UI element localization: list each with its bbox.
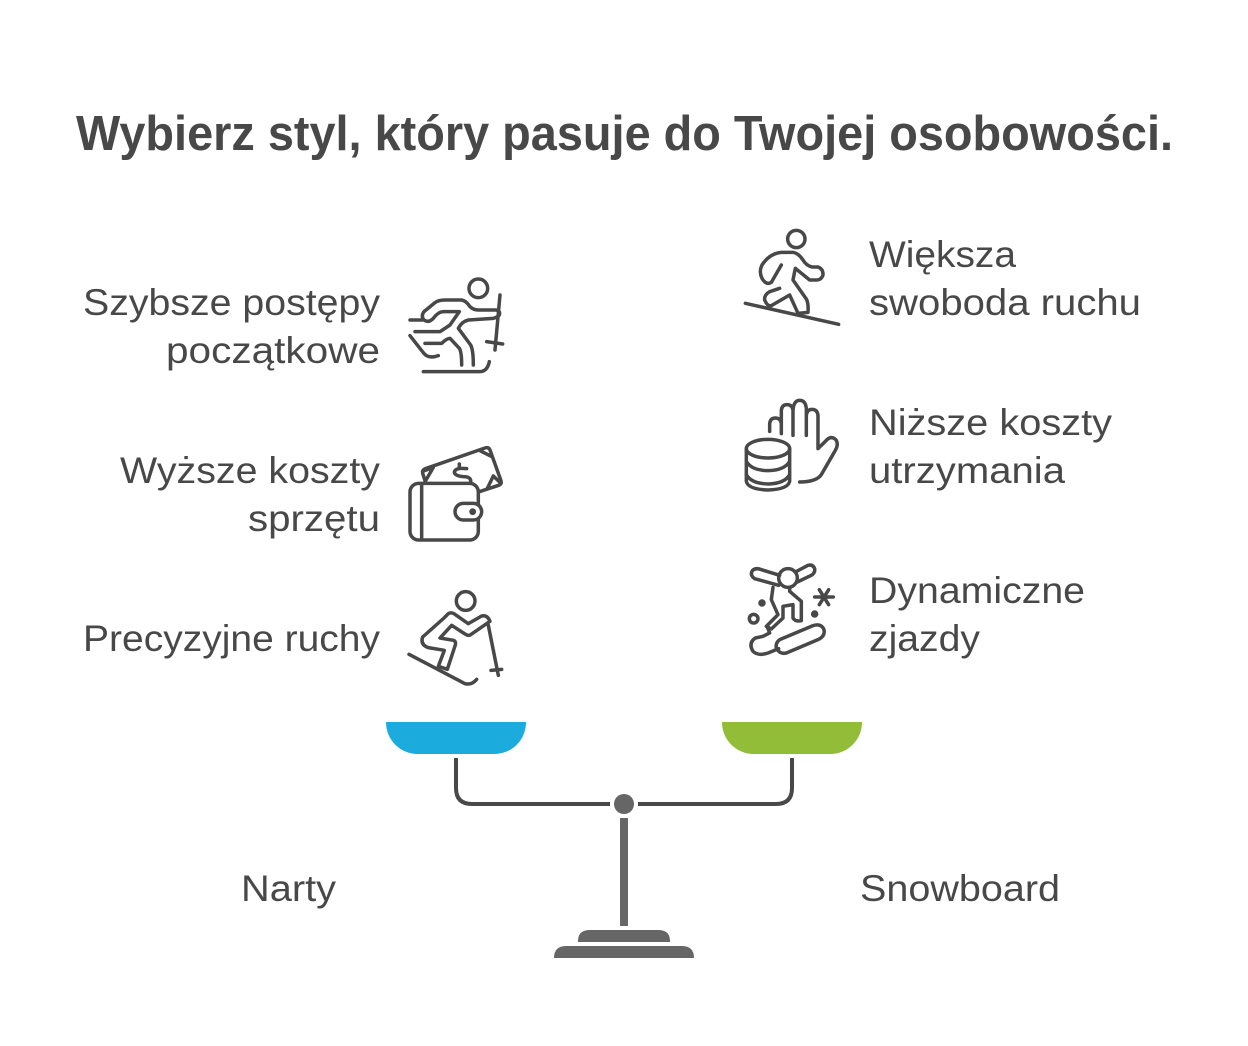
pivot [614, 794, 634, 814]
text: Niższe koszty utrzymania: Niższe koszty [869, 401, 1112, 443]
title: Wybierz styl, który pasuje do Twojej osobowości. [76, 107, 1173, 161]
icon: cross-country skier [410, 279, 503, 372]
text: Wyższe koszty sprzętu [120, 449, 380, 539]
text: Precyzyjne ruchy: Precyzyjne ruchy [83, 617, 380, 659]
label: Snowboard: Snowboard [860, 867, 1060, 909]
text: Niższe koszty utrzymania: utrzymania [869, 449, 1065, 491]
text: Dynamiczne zjazdy: zjazdy [869, 617, 980, 659]
text: Większa swoboda ruchu: swoboda ruchu [869, 281, 1141, 323]
right bowl [722, 722, 862, 754]
text: Wyższe koszty sprzętu: Wyższe koszty [120, 449, 380, 491]
beam [456, 758, 792, 804]
text: Szybsze postępy początkowe: Szybsze postępy [83, 281, 380, 323]
text: Dynamiczne zjazdy [869, 569, 1085, 659]
pole [620, 818, 628, 926]
text: Wyższe koszty sprzętu: sprzętu [248, 497, 380, 539]
balance scale [386, 722, 862, 958]
text: Niższe koszty utrzymania [869, 401, 1112, 491]
icon: wallet with banknote [410, 448, 501, 540]
icon: snowboarder on slope [745, 230, 839, 324]
text: Szybsze postępy początkowe: początkowe [166, 329, 380, 371]
icon: coins and hand [746, 400, 837, 490]
base [554, 930, 694, 958]
icon: downhill skier [409, 592, 502, 684]
text: Większa swoboda ruchu [869, 233, 1141, 323]
icon: snowboarder jumping [749, 565, 833, 654]
text: Szybsze postępy początkowe [83, 281, 380, 371]
label: Narty: Narty [241, 867, 336, 909]
text: Większa swoboda ruchu: Większa [869, 233, 1016, 275]
left bowl [386, 722, 526, 754]
text: Dynamiczne zjazdy: Dynamiczne [869, 569, 1085, 611]
